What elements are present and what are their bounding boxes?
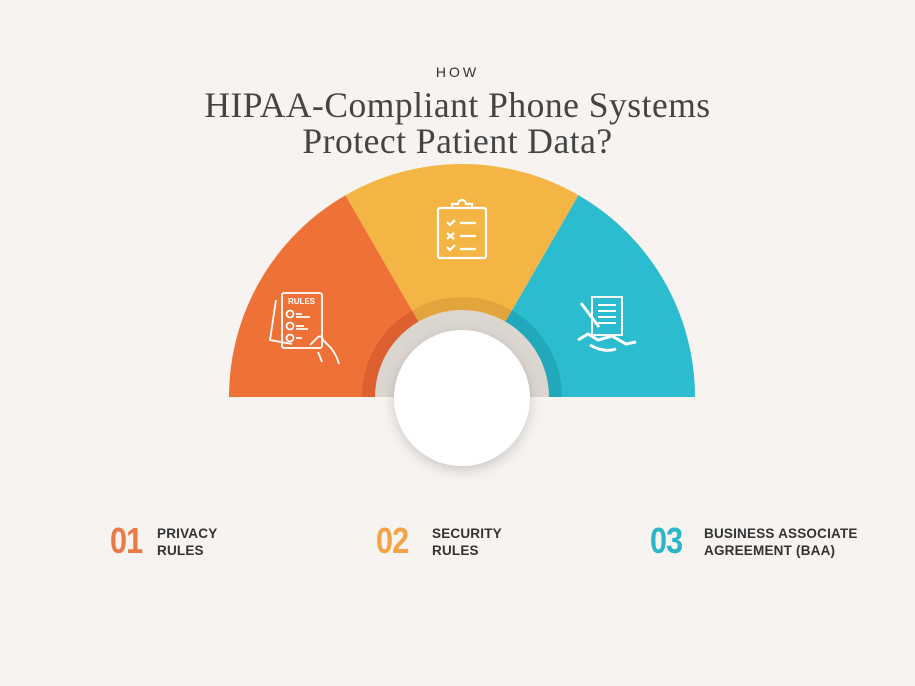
title	[204, 85, 711, 161]
segment: blue	[462, 195, 695, 397]
number 01: 01	[110, 520, 142, 561]
item 01	[110, 520, 217, 561]
label security rules: RULES	[432, 543, 479, 558]
label BAA	[704, 526, 858, 558]
number 02: 02	[376, 520, 408, 561]
label BAA: AGREEMENT (BAA)	[704, 543, 835, 558]
label privacy rules	[157, 526, 217, 558]
icon: contract handshake	[578, 297, 636, 350]
label privacy rules: RULES	[157, 543, 204, 558]
segment: yellow	[346, 164, 578, 397]
number 03: 03	[650, 520, 682, 561]
label privacy rules: PRIVACY	[157, 526, 217, 541]
segment: orange	[229, 195, 462, 397]
label security rules: SECURITY	[432, 526, 502, 541]
icon: clipboard	[438, 200, 486, 258]
icon: rules paper	[270, 293, 339, 364]
heading: HOW: HOW	[436, 64, 479, 80]
inner darker ring	[362, 297, 562, 397]
icon: rules paper: RULES	[288, 297, 316, 306]
title: Protect Patient Data?	[302, 121, 613, 161]
white circle	[394, 330, 530, 466]
item 03	[650, 520, 858, 561]
label security rules	[432, 526, 502, 558]
label BAA: BUSINESS ASSOCIATE	[704, 526, 858, 541]
title: HIPAA-Compliant Phone Systems	[204, 85, 711, 125]
item 02	[376, 520, 502, 561]
